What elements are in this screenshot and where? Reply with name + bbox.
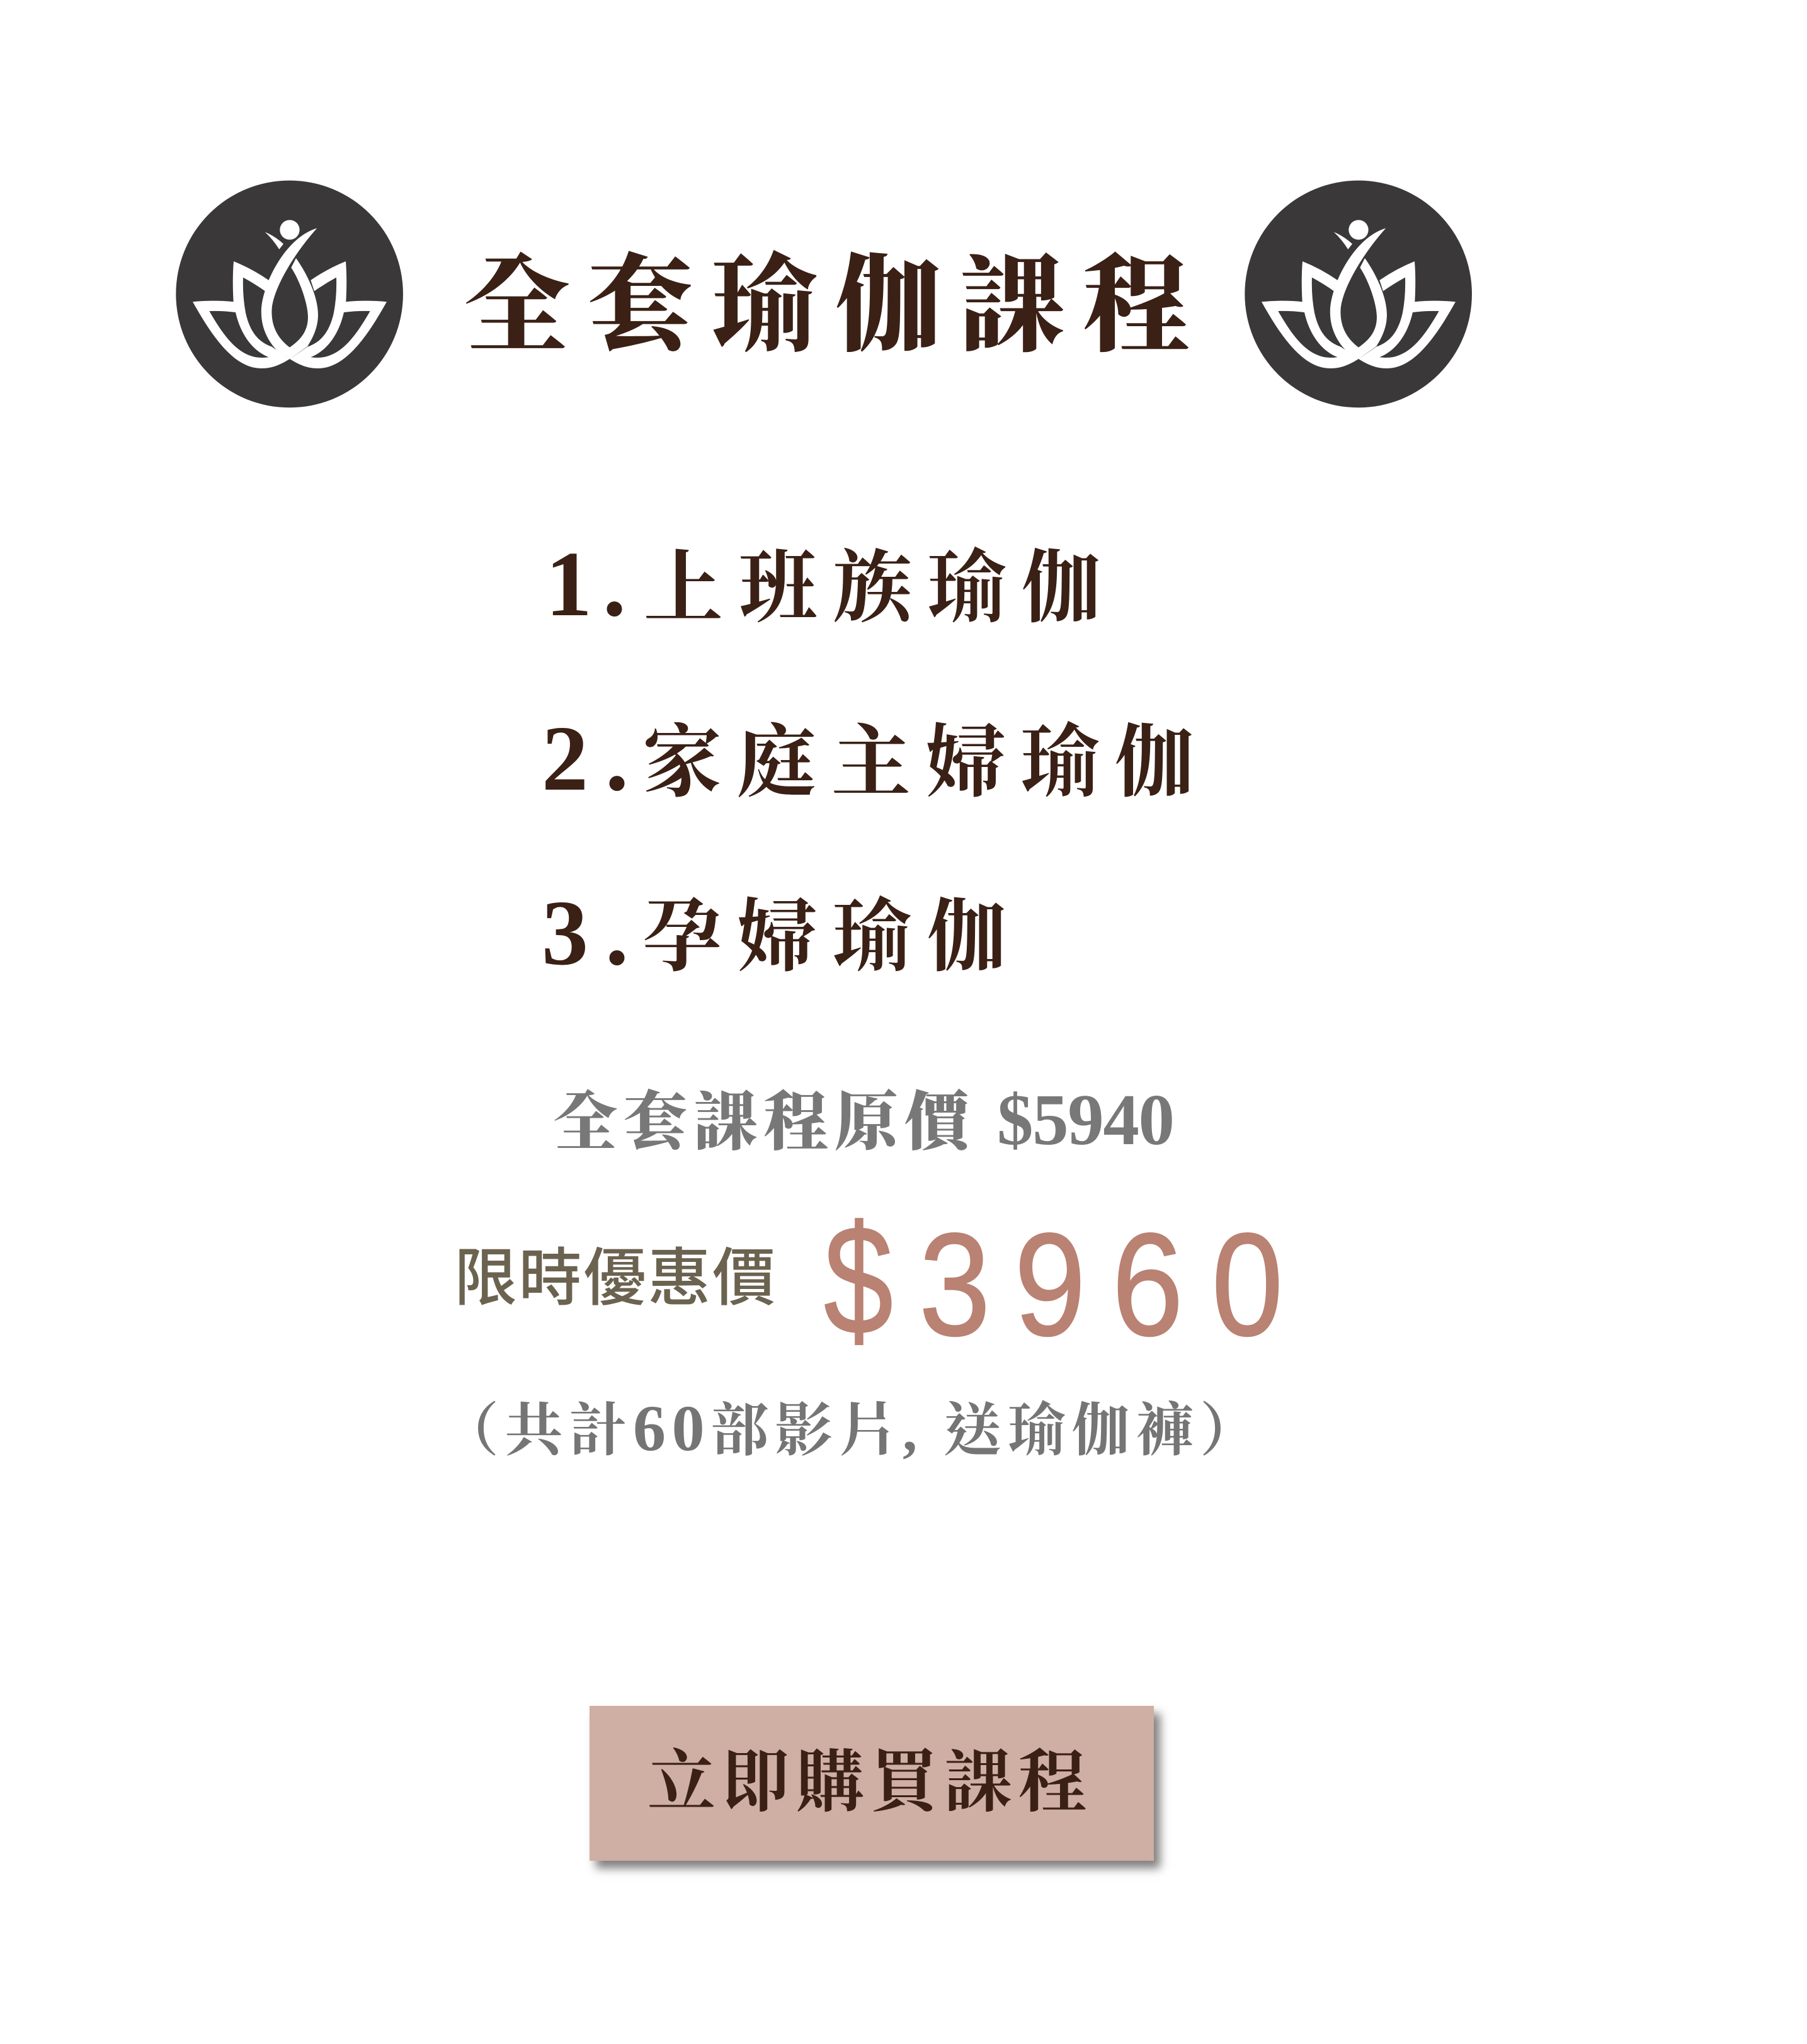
button label: 立即購買課程 [647,1746,1086,1820]
icon: right lotus logo [1245,181,1472,407]
course item 1: 1. [545,533,626,636]
discount price: 6 [1112,1203,1183,1366]
icon: left lotus logo [176,181,403,407]
course item 1: 上班族瑜伽 [644,545,1101,633]
note: 60 videos and yoga pants: （共計60部影片, 送瑜伽褲） [441,1392,1258,1465]
discount label: 限時優惠價 [454,1243,775,1314]
course item 2: 2. [542,707,629,810]
discount price: 9 [1014,1203,1086,1366]
original price: 全套課程原價 [553,1087,977,1159]
discount price: $ [824,1194,893,1367]
course item 3 [542,882,1006,985]
original price [553,1080,1175,1160]
title: 全套瑜伽課程 [464,248,1189,365]
course item 2: 家庭主婦瑜伽 [642,720,1194,807]
course item 3: 孕婦瑜伽 [642,894,1006,982]
discount price [824,1194,1283,1367]
discount price: 3 [919,1203,991,1366]
discount price: 0 [1212,1203,1283,1366]
course item 1 [545,533,1101,636]
original price: $5940 [997,1080,1175,1160]
course item 3: 3. [542,882,629,985]
button: buy course [590,1706,1154,1861]
